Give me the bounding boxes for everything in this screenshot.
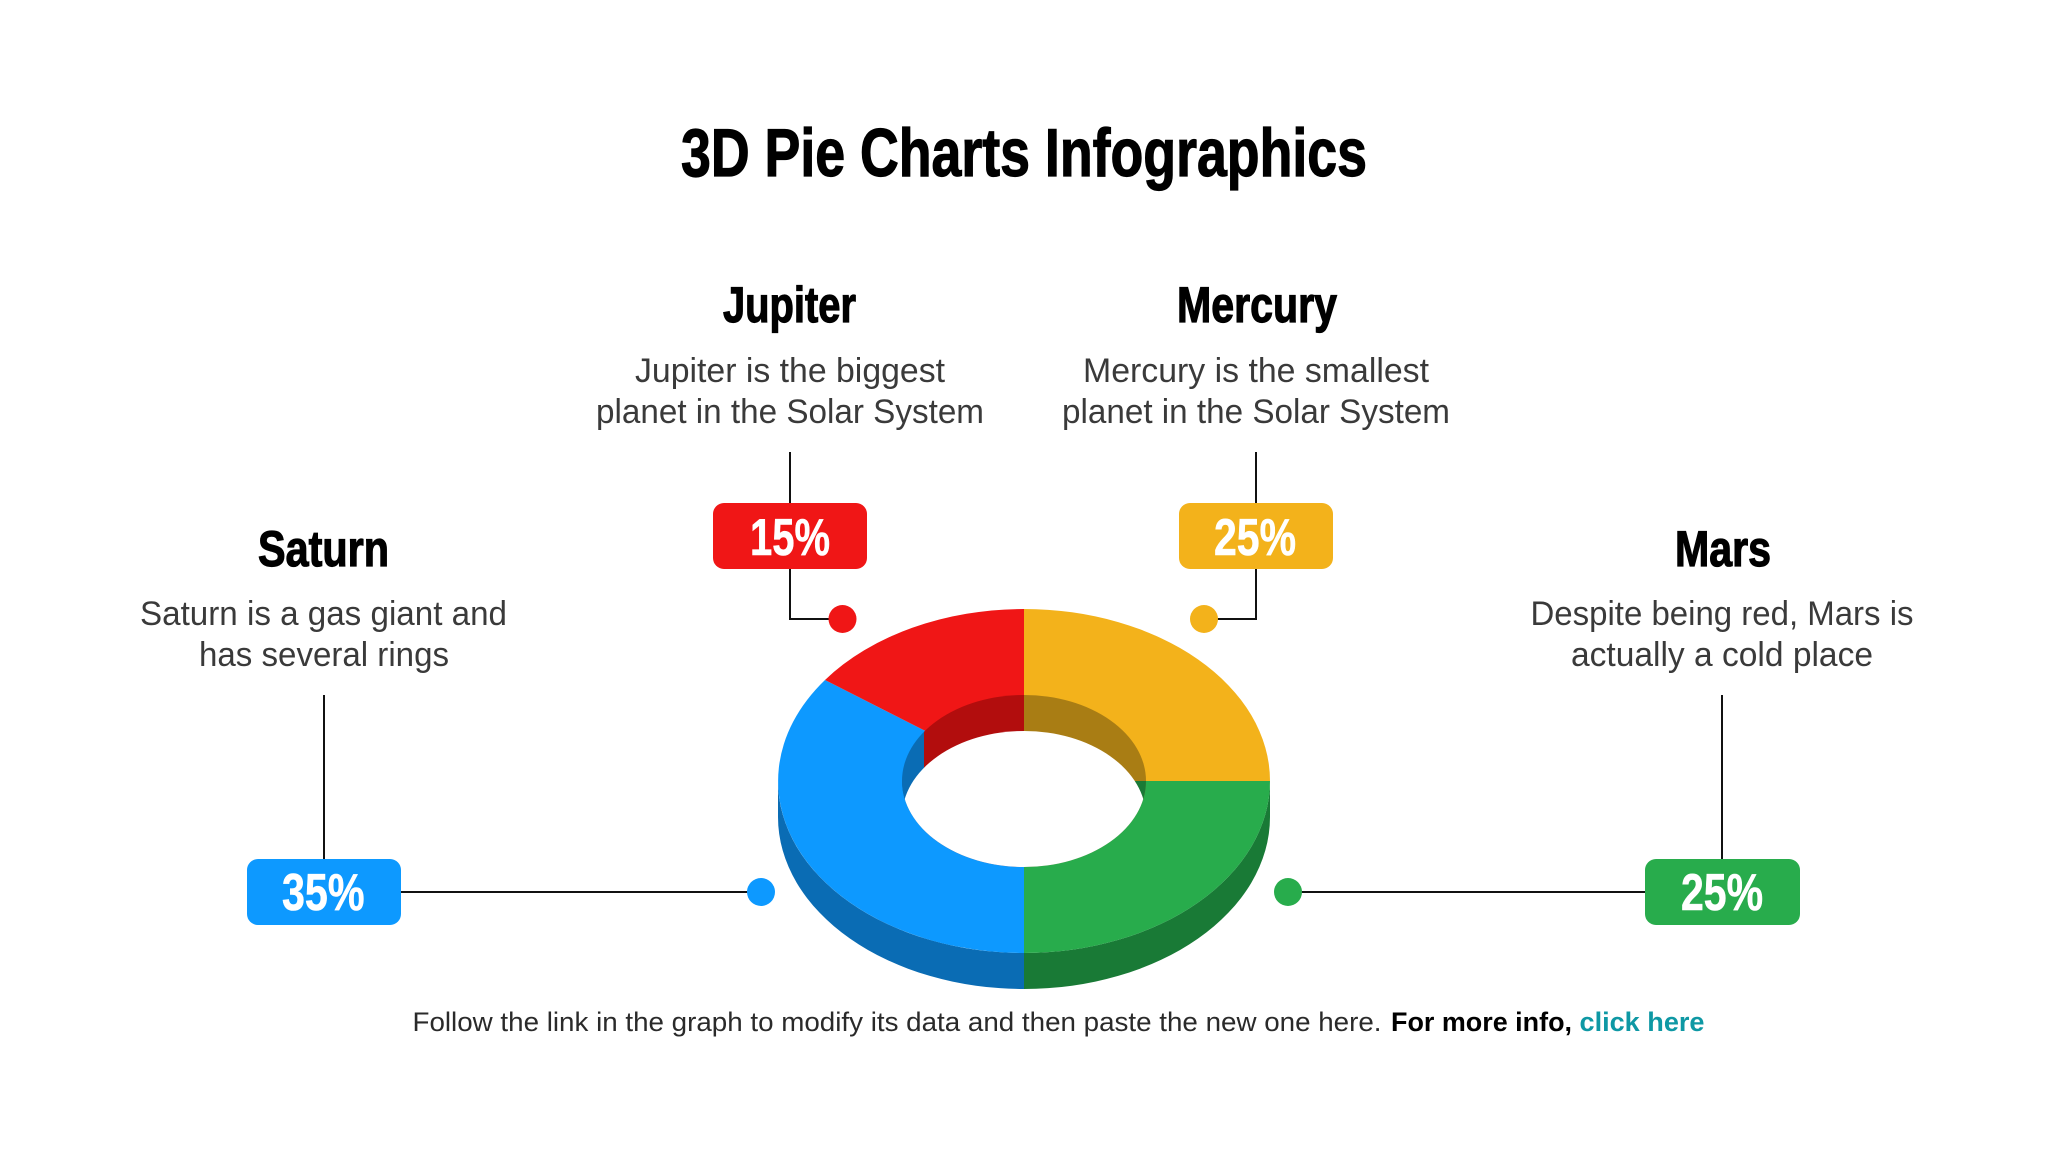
panel: Jupiter: [596, 277, 984, 633]
Jupiter percentage badge: 15%: [750, 509, 830, 567]
Mars description: Despite being red, Mars is: [1530, 595, 1914, 633]
Mars heading: Mars: [1675, 521, 1771, 577]
Mercury description: Mercury is the smallest: [1083, 352, 1430, 390]
Saturn connector: [324, 695, 761, 892]
Mercury connector: [1204, 452, 1256, 619]
Saturn description: [140, 595, 507, 674]
Jupiter description: planet in the Solar System: [596, 393, 984, 431]
panel: Mars: [1274, 521, 1914, 925]
Jupiter connector: [790, 452, 843, 619]
Mercury percentage badge: 25%: [1214, 509, 1296, 567]
Mercury description: planet in the Solar System: [1062, 393, 1450, 431]
Jupiter description: Jupiter is the biggest: [635, 352, 946, 390]
footer note: For more info,: [1391, 1007, 1572, 1037]
Mercury heading: Mercury: [1177, 277, 1337, 333]
top face: green 25%: [1024, 781, 1270, 953]
Mars description: actually a cold place: [1571, 636, 1873, 674]
Jupiter percentage badge: [713, 503, 867, 569]
inner wall: [902, 695, 1146, 867]
panel: Mercury: [1062, 277, 1450, 633]
side wall: blue: [778, 781, 1024, 989]
Mars percentage badge: 25%: [1681, 864, 1763, 922]
Saturn marker dot: [747, 878, 775, 906]
Mars connector: [1288, 695, 1722, 892]
3D donut chart: [778, 609, 1270, 989]
Mercury description: [1062, 352, 1450, 431]
Jupiter heading: Jupiter: [723, 277, 856, 333]
donut hole: [904, 731, 1144, 867]
Mars percentage badge: [1645, 859, 1800, 925]
footer note: Follow the link in the graph to modify its data and then paste the new one here.: [412, 1007, 1382, 1037]
Mercury percentage badge: [1179, 503, 1333, 569]
top face: blue 35%: [778, 680, 1024, 953]
footer note: click here: [1580, 1007, 1704, 1037]
title: 3D Pie Charts Infographics: [681, 115, 1367, 191]
top face: red 15%: [825, 609, 1024, 781]
Mars marker dot: [1274, 878, 1302, 906]
top face: yellow 25%: [1024, 609, 1270, 781]
panel: Saturn: [140, 521, 775, 925]
Saturn description: Saturn is a gas giant and: [140, 595, 507, 633]
Jupiter description: [596, 352, 984, 431]
Saturn description: has several rings: [199, 636, 449, 674]
Jupiter marker dot: [828, 605, 856, 633]
Mercury marker dot: [1190, 605, 1218, 633]
Saturn percentage badge: [247, 859, 401, 925]
Saturn percentage badge: 35%: [282, 864, 364, 922]
Saturn heading: Saturn: [258, 521, 389, 577]
Mars description: [1530, 595, 1914, 674]
side wall: green: [1024, 781, 1270, 989]
